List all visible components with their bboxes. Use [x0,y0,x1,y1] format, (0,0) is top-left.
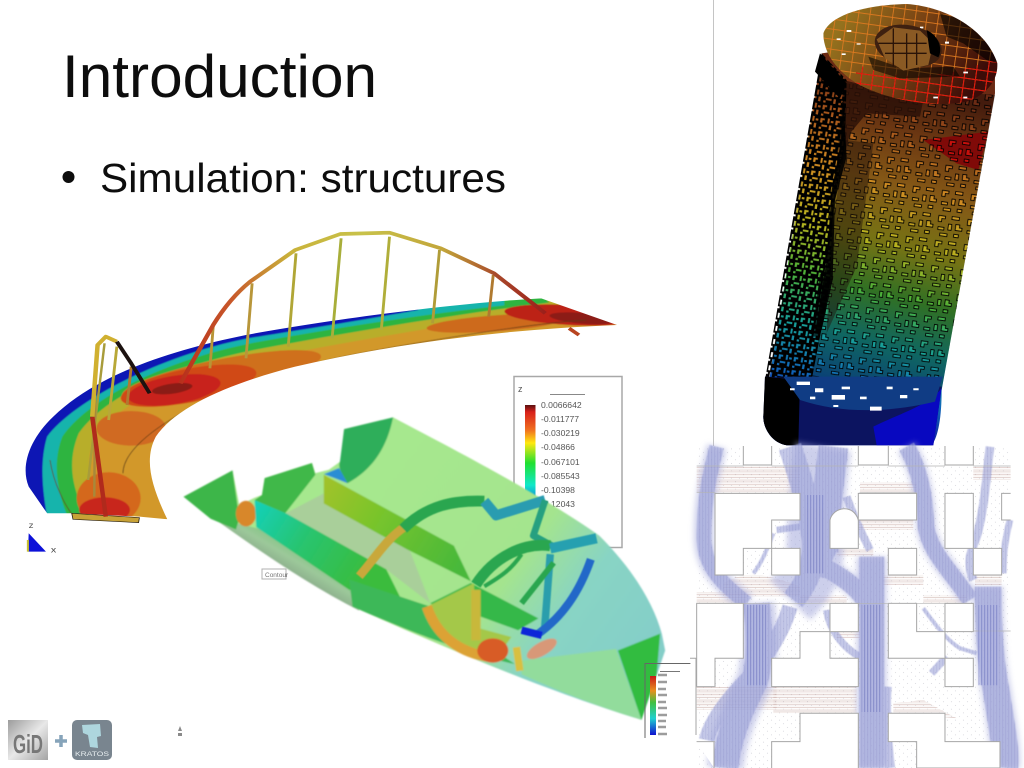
main arch [180,233,545,383]
axis triad: z [29,521,34,530]
central core [871,19,946,73]
contour label box: Contour [265,572,289,579]
legend panel: hull stress scale: -0.085543 [541,471,580,481]
legend panel: hull stress scale: -0.030219 [541,428,580,438]
cylinder body [763,40,995,445]
axis triad: x [51,545,56,555]
legend panel: hull stress scale: z [518,384,523,394]
blue stream bundles [704,447,1010,768]
logo: GiD [8,720,48,760]
bridge abutment [72,513,139,523]
cylinder top face [823,4,998,104]
wide stream halos [704,447,1005,768]
axis triad [28,521,56,555]
upper dark shade [843,80,923,160]
central flow overlay [757,495,988,712]
pressure streaks [697,466,1011,718]
hull shell [184,417,665,720]
legend panel: hull stress scale [514,376,622,548]
contour label box [262,569,289,579]
bridge deck [26,298,617,520]
small page mark [178,726,182,736]
perforated cylinder simulation [763,0,1000,445]
legend panel: hull stress scale: -0.067101 [541,457,580,467]
legend panel: hull stress scale: -0.011777 [541,414,579,424]
plus sign [55,735,67,747]
title: Introduction [62,43,377,110]
small legend panel [645,664,695,738]
logo: Kratos [72,720,112,760]
hull simulation [184,417,665,720]
bridge simulation [0,233,640,555]
divider line [712,0,714,446]
black speckled left band [765,53,847,380]
legend panel: hull stress scale: 0.0066642 [541,400,582,410]
bridge end strut [569,328,579,335]
legend panel: hull stress scale: -0.10398 [541,485,575,495]
hull arches [359,500,597,635]
flow background [697,446,1011,768]
surface cells [810,83,995,390]
main arch hangers [210,237,493,368]
logo: GiD: GiD [13,729,43,759]
bullet text: Simulation: structures [100,155,506,201]
logo: Kratos: KRATOS [75,751,110,758]
shaded fold [827,140,873,333]
red patch [923,132,988,170]
block edge lines [697,466,1011,742]
legend panel: hull stress scale: -0.04866 [541,442,575,452]
solid blocks [690,446,1011,768]
legend panel: hull stress scale: -0.12043 [541,499,575,509]
small arch and hangers [88,337,150,517]
flow field simulation [690,446,1011,768]
lower end cap [763,377,943,445]
